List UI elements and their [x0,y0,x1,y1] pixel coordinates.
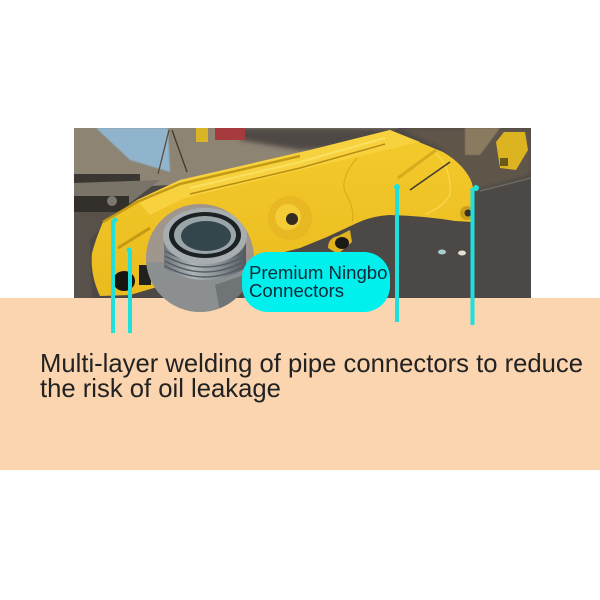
callout line 1 [111,218,118,333]
callout line 4 [470,185,479,325]
callout line 2 [126,248,132,333]
workshop floor [74,128,531,298]
end pivot [460,206,470,220]
pivot hole on boom [268,196,312,240]
callout pill: Premium Ningbo Connectors: Connectors [249,280,344,301]
yellow part, top right [496,132,528,170]
boom foot brackets [113,230,352,291]
background photo: excavator boom in workshop [74,128,531,298]
callout pill: Premium Ningbo Connectors: Premium Ningbo [249,262,387,283]
peach text panel [0,298,600,470]
connector photo disc [146,204,258,312]
description text: the risk of oil leakage [40,375,281,403]
description text [40,350,583,403]
callout line 3 [394,184,400,322]
boom body [92,130,474,296]
description text: Multi-layer welding of pipe connectors to reduce [40,350,583,378]
callout pill: Premium Ningbo Connectors [242,252,390,312]
